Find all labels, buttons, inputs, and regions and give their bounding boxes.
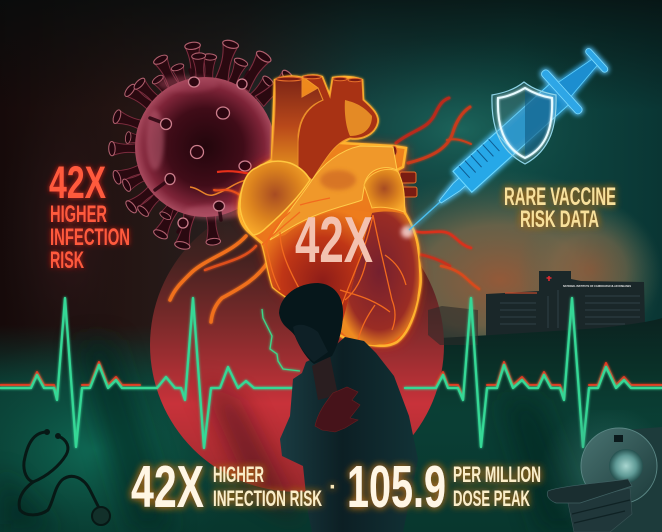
heart veins reaching outward [170,98,479,322]
aorta tubes [298,77,378,180]
flag fabric folds [0,340,590,532]
stat caption: per million: PER MILLION [453,462,541,487]
stat: 42X: 42X [131,454,204,520]
stat caption: dose peak: DOSE PEAK [453,486,530,511]
heart glow halo [239,143,420,344]
breath trace by the face [262,309,300,371]
person holding chest [279,283,418,532]
face shade [293,325,328,362]
caption line three: RISK [50,247,84,274]
tube openings [276,75,417,197]
icon: shield [492,82,556,164]
heart [239,75,421,346]
stat caption: higher: HIGHER [213,462,264,487]
filled barrel section [453,132,515,192]
stat caption: infection risk: INFECTION RISK [213,486,322,511]
shirt [312,356,338,400]
separator dot: · [329,474,337,501]
coronary veins [262,198,406,340]
barrel scale [459,139,499,178]
ecg heartbeat line [0,298,662,448]
injection spark [401,226,413,238]
caption line two: INFECTION [50,224,130,251]
central ventricle [262,210,372,330]
hand on chest [315,387,360,432]
aortic arch highlight [345,100,372,136]
hospital silhouette: NATIONAL INSTITUTE OF CARDIOVASCULAR DISEASES [563,284,631,288]
upper ventricle band [270,146,397,240]
label: higher infection risk, left [49,157,130,274]
right atrium [364,169,404,212]
right chamber [340,212,419,345]
icon: stethoscope [19,430,110,525]
head [279,283,343,364]
plunger head [584,47,609,74]
low building beside hospital [428,306,478,345]
barrel [453,82,571,192]
flag: red circle on green [150,198,444,492]
hospital silhouette [440,271,662,430]
left lobe [240,161,310,235]
stat: 42X: 42X [49,157,106,208]
tip cone [437,178,466,206]
needle [409,200,442,231]
plunger rod [555,55,601,99]
bottom stat band [131,454,541,520]
label line two: RISK DATA [520,206,599,233]
caption line one: HIGHER [50,201,107,228]
stat: 42X on heart: 42X [295,203,373,276]
icon: virus [109,39,297,251]
heart silhouette [239,76,421,346]
stat: 105.9: 105.9 [347,454,446,520]
mri scanner [540,410,662,532]
label: rare vaccine risk data [504,183,616,233]
icon: syringe [390,38,618,251]
green main trace [0,298,662,448]
flange [540,68,584,115]
red echo trace [0,362,662,396]
hoodie [280,337,418,532]
